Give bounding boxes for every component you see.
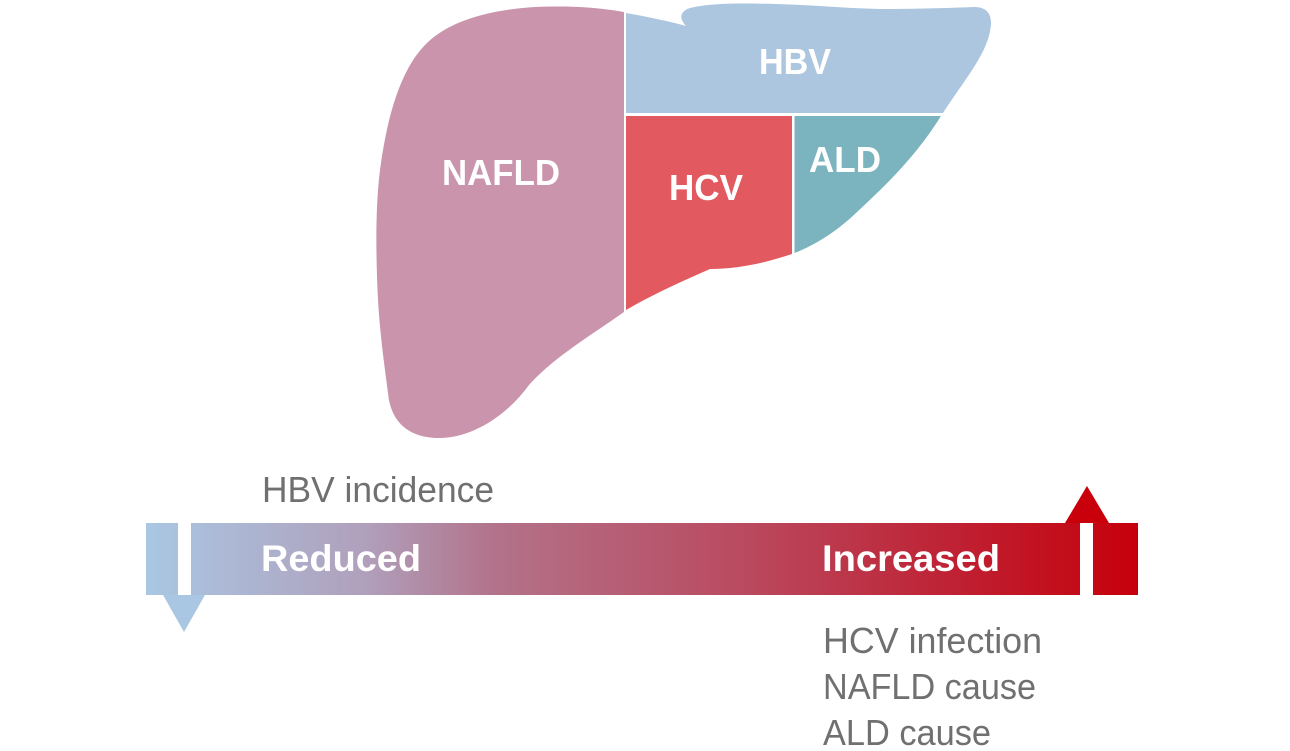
gradient scale bar: [146, 486, 1138, 632]
label: HBV incidence: HBV incidence: [262, 469, 494, 510]
icon: up arrow: [1065, 486, 1109, 523]
low marker: [178, 523, 191, 595]
list of increased factors: HCV infection: [823, 620, 1042, 661]
liver segment: ALD: ALD: [809, 139, 881, 180]
list of increased factors: NAFLD cause: [823, 666, 1036, 707]
label: Increased: Increased: [822, 538, 1000, 579]
liver segment: NAFLD: NAFLD: [442, 152, 560, 193]
liver diagram: [376, 4, 991, 438]
list of increased factors: [823, 620, 1042, 751]
liver segment: HCV: [626, 116, 792, 310]
icon: down arrow: [163, 595, 205, 632]
liver segment: HCV: HCV: [669, 167, 743, 208]
liver segment: HBV: HBV: [759, 41, 831, 82]
label: Reduced: Reduced: [261, 538, 421, 579]
liver segment: HBV: [626, 4, 991, 113]
high marker: [1080, 523, 1093, 595]
gradient band: [146, 523, 1138, 595]
liver segment: ALD: [794, 116, 941, 253]
liver segment: NAFLD: [376, 7, 624, 438]
